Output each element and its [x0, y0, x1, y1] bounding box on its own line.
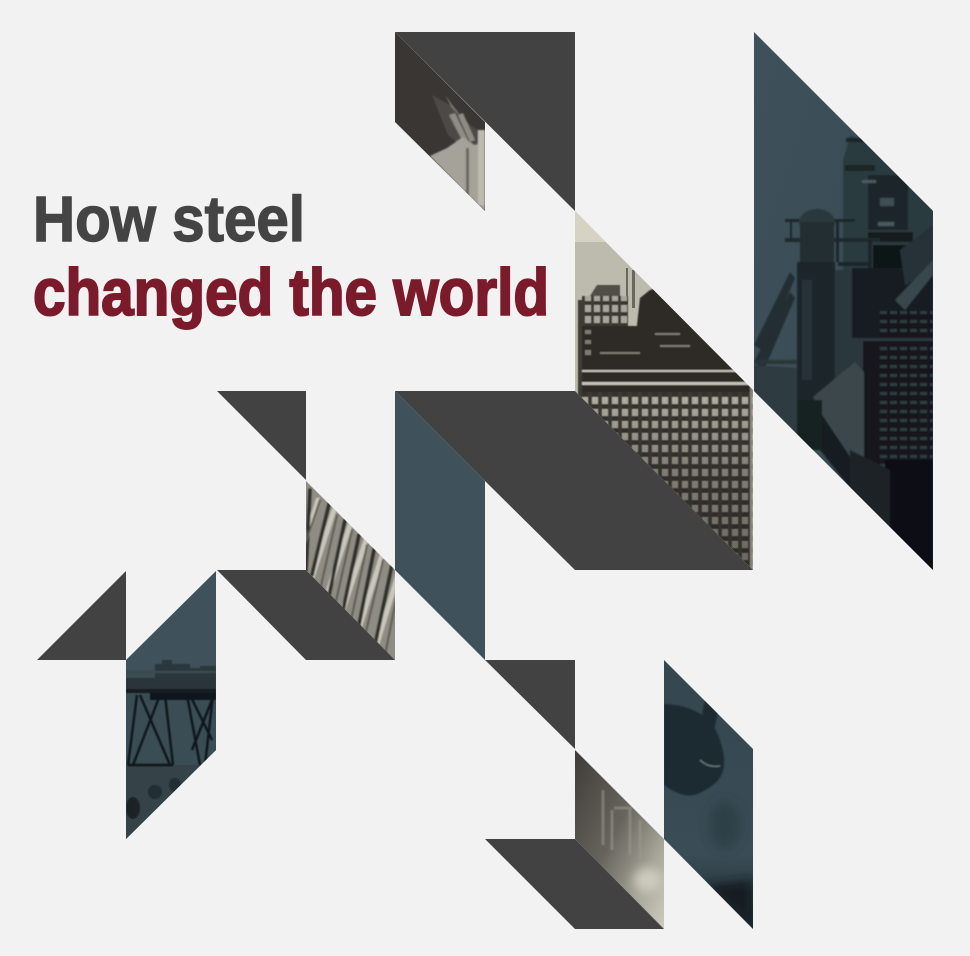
- panel: bottom dark parallelogram: [485, 839, 664, 929]
- panel: lower dark parallelogram: [217, 570, 395, 660]
- photo panel: blast furnace plant: [754, 32, 934, 572]
- train: [155, 660, 216, 679]
- gallery and piping: [785, 219, 855, 222]
- crane masts: [626, 268, 635, 308]
- solid dark upper floors: [582, 326, 745, 372]
- furnace tower: [843, 136, 933, 270]
- panel: central teal parallelogram: [395, 391, 485, 660]
- roof and low works: [813, 362, 864, 460]
- photo panel: steel cable: [306, 481, 395, 660]
- title line: How steel: How steel: [33, 183, 305, 255]
- trestles: [128, 695, 213, 765]
- photo panel: skyscraper steel frame: [575, 211, 753, 571]
- tower crown right: [636, 288, 690, 327]
- photo panel: steel workers pouring: [395, 32, 485, 212]
- deck: [155, 671, 216, 673]
- panel: left dark triangle: [37, 571, 126, 660]
- conveyor: [754, 272, 795, 352]
- panel: top dark triangle: [395, 32, 575, 211]
- panel: small dark triangle: [217, 391, 306, 480]
- tower crown left: [582, 296, 628, 326]
- photo panel: steel mill interior: [575, 750, 665, 930]
- photo panel: molten steel pour: [664, 660, 754, 930]
- panel: lower right dark triangle: [485, 660, 575, 749]
- banded floors: [581, 372, 753, 393]
- photo panel: railway trestle bridge: [126, 571, 216, 841]
- panel: central dark parallelogram: [395, 391, 753, 570]
- stack: [799, 208, 835, 224]
- title line: changed the world: changed the world: [33, 255, 549, 329]
- tall shed: [862, 340, 881, 466]
- title: [33, 183, 549, 329]
